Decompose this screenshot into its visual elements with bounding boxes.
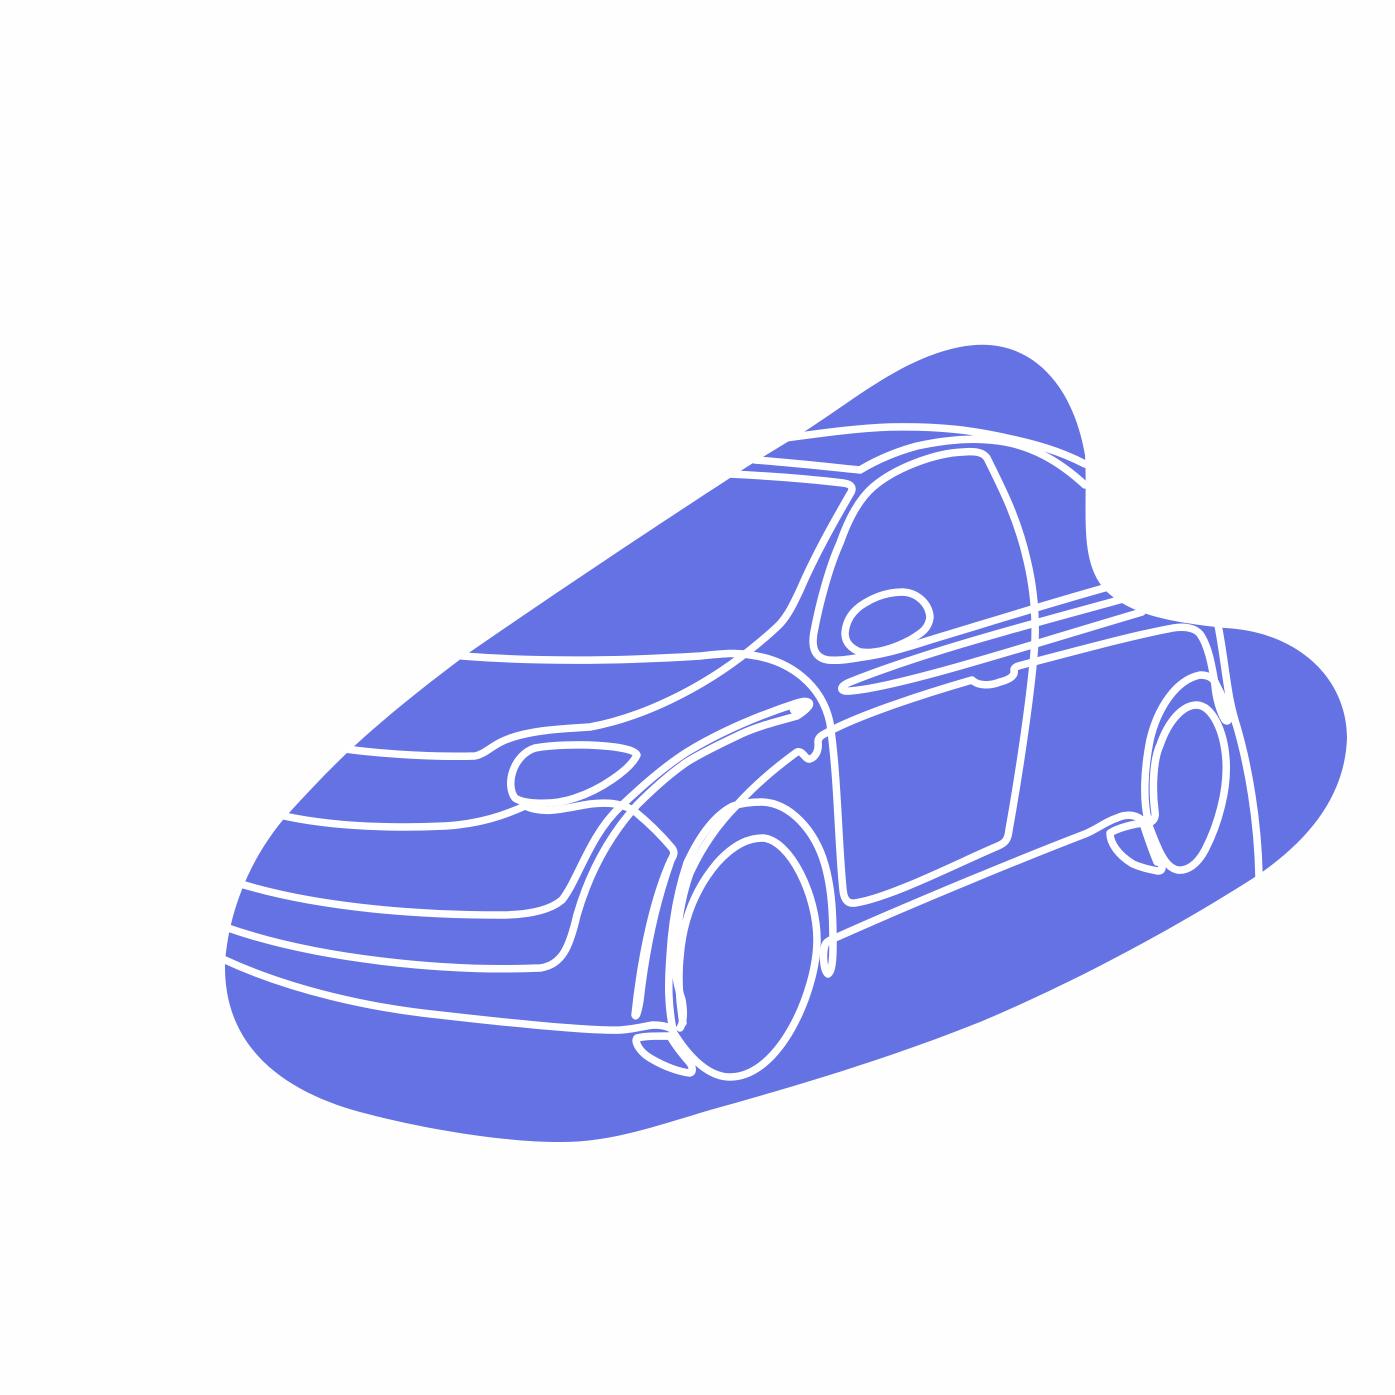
front fascia lines — [225, 701, 810, 1030]
roof lines — [755, 427, 1085, 485]
fender tip — [795, 704, 807, 709]
rear pillar — [1218, 625, 1259, 877]
rear wheel — [1145, 675, 1226, 870]
headlight — [511, 745, 637, 803]
belt lines — [828, 597, 1228, 732]
wheel arch outer — [669, 802, 835, 1030]
background blob — [225, 345, 1347, 1142]
rocker panel — [835, 815, 1157, 938]
rear mud flap — [1110, 823, 1162, 871]
front mud flap — [636, 1036, 692, 1073]
door and window — [462, 452, 1108, 903]
car outline — [225, 427, 1259, 1077]
front wheel — [636, 732, 835, 1077]
tire — [672, 838, 817, 1077]
wheel arch inner and door sill — [675, 732, 828, 1028]
windshield and hood edge — [345, 474, 852, 756]
side mirror — [845, 592, 930, 652]
